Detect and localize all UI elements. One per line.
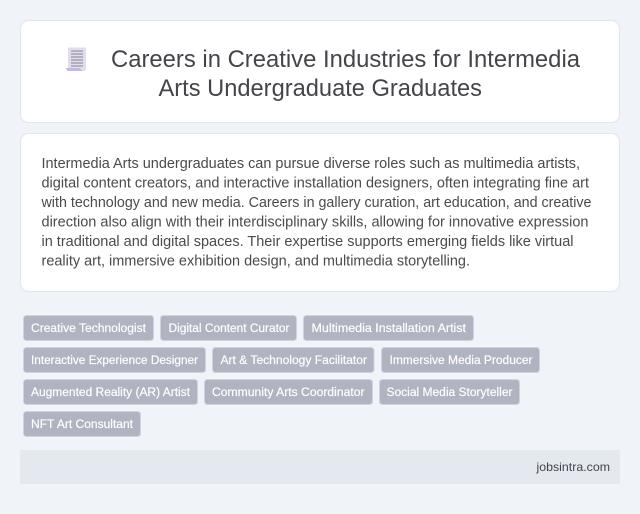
- tag: Digital Content Curator: Digital Content Curator: [168, 321, 290, 335]
- description text: reality art, immersive exhibition design, and multimedia storytelling.: [42, 254, 470, 270]
- tag: Immersive Media Producer: Immersive Media Producer: [390, 353, 532, 367]
- footer source text: jobsintra.com: [535, 460, 610, 474]
- tag: Augmented Reality (AR) Artist: [24, 380, 198, 404]
- title: Careers in Creative Industries for Intermedia: [111, 46, 581, 73]
- tag: Multimedia Installation Artist: Multimedia Installation Artist: [312, 321, 467, 335]
- tag: Social Media Storyteller: Social Media Storyteller: [386, 385, 512, 399]
- tag: Creative Technologist: [24, 316, 154, 340]
- icon: paper scroll: [66, 48, 86, 71]
- panel: title card: [20, 20, 620, 122]
- tag: Social Media Storyteller: [380, 380, 520, 404]
- footer bar: [20, 450, 620, 484]
- tag: Interactive Experience Designer: Interactive Experience Designer: [31, 353, 198, 367]
- tag: Art & Technology Facilitator: [212, 348, 374, 372]
- description text: with technology and new media. Careers in gallery curation, art education, and creative: [41, 195, 591, 211]
- title: Arts Undergraduate Graduates: [158, 75, 482, 102]
- title: [111, 46, 581, 102]
- tag: Creative Technologist: Creative Technologist: [31, 321, 147, 335]
- description text: direction also align with their interdisciplinary skills, allowing for innovative expression: [42, 214, 588, 230]
- tag: Community Arts Coordinator: Community Arts Coordinator: [212, 385, 364, 399]
- description text: [41, 156, 591, 270]
- tag: Interactive Experience Designer: [24, 348, 206, 372]
- tag: NFT Art Consultant: NFT Art Consultant: [31, 417, 134, 431]
- description text: digital content creators, and interactive installation designers, often integrating fine art: [42, 176, 589, 192]
- tag: Immersive Media Producer: [382, 348, 540, 372]
- tag: Digital Content Curator: [160, 316, 296, 340]
- panel: description card: [20, 134, 620, 292]
- tag: Art & Technology Facilitator: Art & Technology Facilitator: [220, 353, 367, 367]
- tag: Multimedia Installation Artist: [304, 316, 474, 340]
- tag: Augmented Reality (AR) Artist: Augmented Reality (AR) Artist: [31, 385, 191, 399]
- career tags: [24, 316, 540, 436]
- tag: Community Arts Coordinator: [204, 380, 372, 404]
- tag: NFT Art Consultant: [24, 412, 140, 436]
- description text: in traditional and digital spaces. Their expertise supports emerging fields like virtual: [42, 234, 574, 250]
- description text: Intermedia Arts undergraduates can pursue diverse roles such as multimedia artists,: [42, 156, 580, 172]
